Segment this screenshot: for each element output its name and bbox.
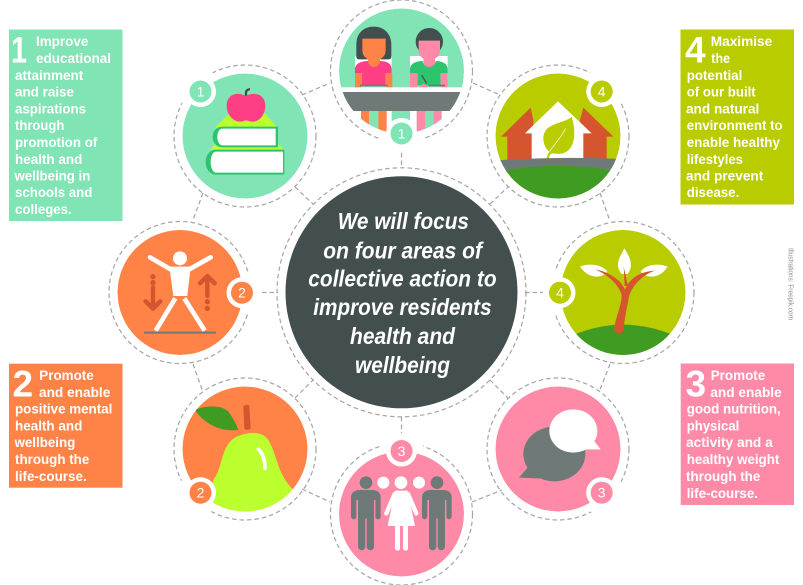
text block 4: enable healthy	[687, 134, 780, 150]
number badges: 2	[197, 485, 205, 501]
icon: exercising figure	[118, 230, 242, 355]
text block 3: healthy weight	[687, 451, 780, 467]
panel: text box 3	[681, 364, 794, 505]
number badges: 4	[556, 285, 564, 301]
central circle with heading	[286, 176, 518, 408]
text block 2: life-course.	[15, 468, 87, 484]
number badges: 3	[398, 443, 406, 459]
number badges: 2	[238, 285, 246, 301]
panel: text box 4	[680, 30, 794, 204]
number badges: 1	[197, 84, 205, 100]
central heading text: health and	[350, 323, 456, 349]
text block 3	[686, 367, 782, 501]
central heading text: collective action to	[308, 266, 497, 292]
text block 2: through the	[15, 451, 89, 467]
text block 1: promotion of	[15, 134, 98, 150]
icon: pear with leaf	[182, 386, 308, 517]
number badges: 4	[598, 84, 606, 100]
number 1: 1	[11, 30, 27, 71]
icon: group of people	[339, 452, 464, 576]
panel: text box 1	[9, 30, 122, 221]
icon: growing plant	[560, 230, 686, 360]
number 3: 3	[686, 364, 706, 404]
central heading text: We will focus	[338, 208, 469, 234]
central heading text	[308, 208, 497, 378]
illustration credit: Illustrations: Freepik.com	[786, 248, 796, 320]
text block 4: the	[711, 50, 730, 66]
icon: houses and leaf	[493, 74, 622, 203]
number 4: 4	[685, 30, 706, 71]
central heading text: on four areas of	[323, 238, 484, 264]
central heading text: improve residents	[313, 294, 492, 320]
text block 4: of our built	[687, 84, 756, 100]
text block 3: and enable	[710, 384, 782, 400]
text block 4: potential	[687, 67, 742, 83]
central heading text: wellbeing	[355, 352, 450, 378]
text block 4	[686, 33, 783, 200]
text block 1: health and	[15, 151, 82, 167]
text block 1: and raise	[15, 84, 74, 100]
text block 2: wellbeing	[14, 434, 75, 450]
icon: speech bubbles	[496, 386, 620, 512]
text block 3: activity and a	[686, 434, 773, 450]
text block 4: environment to	[687, 117, 783, 133]
text block 1: wellbeing in	[14, 168, 90, 184]
dashed connectors	[193, 83, 610, 502]
text block 3: physical	[687, 418, 739, 434]
text block 1: educational	[36, 50, 111, 66]
text block 2: and enable	[39, 384, 110, 400]
text block 1: Improve	[36, 33, 88, 49]
text block 1: aspirations	[15, 100, 86, 116]
number badges: 1	[398, 126, 406, 142]
text block 1: schools and	[15, 184, 92, 200]
text block 2: health and	[15, 418, 82, 434]
icon: students at a desk	[337, 8, 467, 134]
panel: text box 2	[9, 364, 122, 488]
text block 3: life-course.	[687, 485, 758, 501]
number badges	[185, 76, 617, 508]
number 2: 2	[12, 364, 33, 405]
text block 4: and natural	[686, 100, 759, 116]
text block 2: Promote	[39, 367, 94, 383]
text block 1: colleges.	[15, 201, 72, 217]
icon: apple on books	[182, 74, 308, 198]
text block 4: Maximise	[711, 33, 772, 49]
dashed rings behind the circles	[109, 0, 694, 585]
text block 3: Promote	[711, 367, 765, 383]
text block 2: positive mental	[15, 401, 112, 417]
text block 3: through the	[686, 468, 760, 484]
number badges: 3	[598, 485, 606, 501]
text block 3: good nutrition,	[687, 401, 781, 417]
text block 1	[14, 33, 111, 217]
text block 4: disease.	[687, 184, 739, 200]
text block 2	[14, 367, 112, 484]
text block 1: attainment	[15, 67, 84, 83]
text block 4: lifestyles	[687, 151, 743, 167]
text block 4: and prevent	[686, 168, 764, 184]
text block 1: through	[15, 117, 64, 133]
